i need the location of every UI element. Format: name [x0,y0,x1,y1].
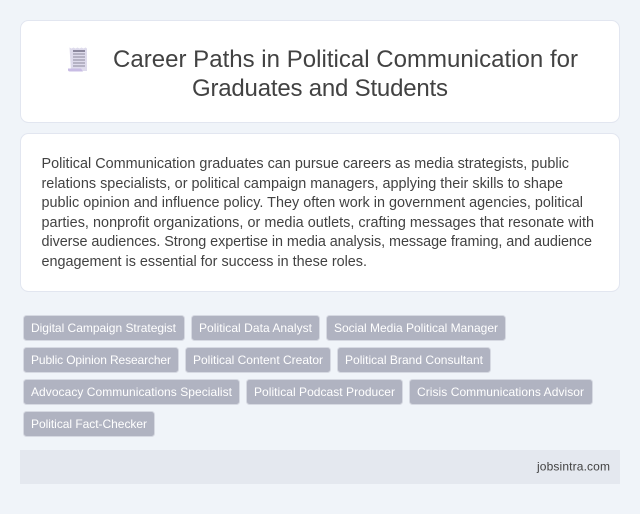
tag: Political Fact-Checker [31,417,147,431]
tag: Political Content Creator [193,353,323,367]
tag [192,316,320,340]
panel: description [20,134,620,292]
tag [246,380,402,404]
tag: Public Opinion Researcher [31,353,171,367]
tag: Political Data Analyst [199,321,313,335]
tag [338,348,490,372]
title: Graduates and Students [192,75,448,102]
footer bar [20,450,620,484]
tag [410,380,592,404]
description text: engagement is essential for success in these roles. [42,254,367,270]
tag [326,316,506,340]
tag [24,348,178,372]
tag [24,380,240,404]
title [113,46,578,102]
description text: public opinion and influence policy. They often work in government agencies, political [42,195,583,211]
tag [24,316,184,340]
description text: relations specialists, or political campaign managers, applying their skills to shape [42,176,563,192]
icon: document scroll [68,48,87,72]
description text: parties, nonprofit organizations, or media outlets, crafting messages that resonate with [42,215,594,231]
tag: Advocacy Communications Specialist [31,385,233,399]
tag: Political Podcast Producer [254,385,395,399]
footer source text: jobsintra.com [536,460,610,474]
description text: Political Communication graduates can pursue careers as media strategists, public [42,156,569,172]
tag: Political Brand Consultant [345,353,484,367]
tag [186,348,330,372]
description text: diverse audiences. Strong expertise in media analysis, message framing, and audience [42,234,592,250]
tag: Digital Campaign Strategist [31,321,177,335]
title: Career Paths in Political Communication for [113,46,578,73]
tag: Social Media Political Manager [334,321,498,335]
tag list [24,316,592,436]
panel: title card [20,20,620,122]
tag: Crisis Communications Advisor [417,385,584,399]
tag [24,412,154,436]
description text [42,156,594,270]
